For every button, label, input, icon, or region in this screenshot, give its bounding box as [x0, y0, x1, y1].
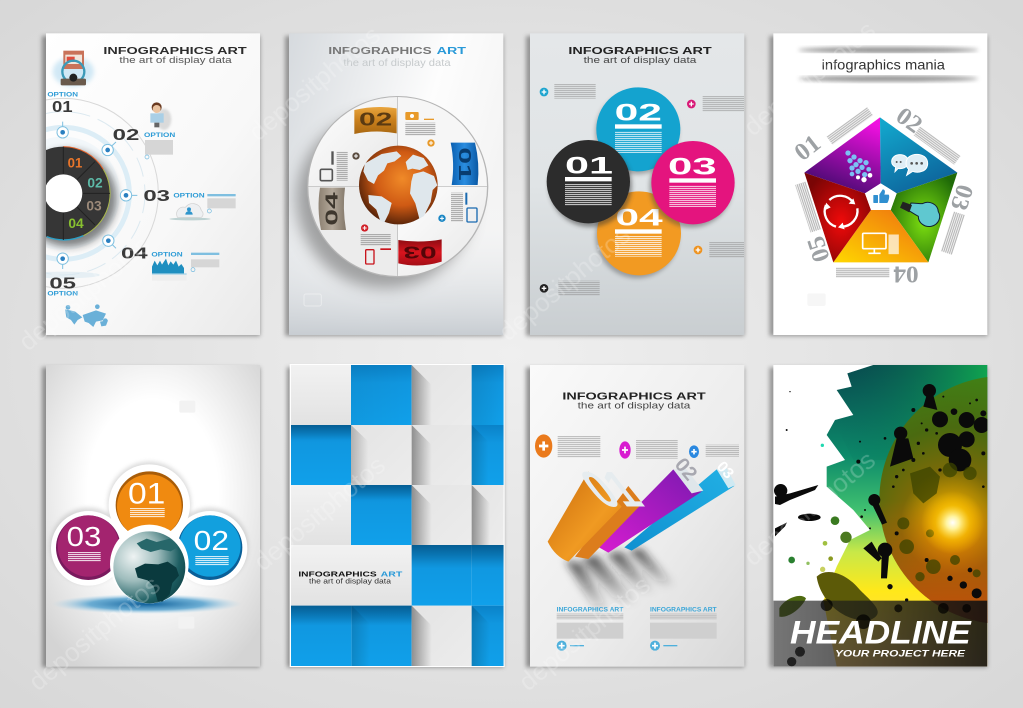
3D number 01 orange [548, 462, 655, 562]
3D number 03 blue: 03 [713, 458, 737, 482]
heading: infographics art: the art of display data [343, 58, 451, 69]
gradient field [823, 365, 987, 667]
olive and green blots [779, 444, 878, 620]
icon: dots [845, 150, 872, 182]
pentagon numbers [789, 102, 978, 288]
faint camera mark [807, 293, 826, 306]
band splatter [787, 599, 971, 666]
pentagon numbers: 02 [891, 102, 927, 139]
pentagon captions [795, 107, 965, 277]
circle 02 blue: 02 [615, 100, 662, 127]
panel: blue and grey squares flyer [287, 364, 505, 667]
shadow ellipse [52, 594, 242, 614]
heading: infographics art: INFOGRAPHICS [298, 570, 377, 579]
panel: circular timeline infographic flyer [39, 34, 263, 339]
watermarks: depositphotos [248, 450, 391, 577]
heading: infographics art: the art of display data [119, 55, 233, 65]
lens flare [924, 494, 981, 552]
panel: 3D numbers flyer [526, 365, 744, 667]
watermarks: depositphotos [493, 220, 636, 347]
option numbers [49, 99, 170, 293]
watermarks: depositphotos [513, 570, 656, 697]
quadrant icons and text [320, 112, 477, 264]
icon: computer [863, 233, 898, 253]
circle 04 orange: 04 [615, 204, 664, 231]
icon: world map [65, 304, 108, 327]
bottom text columns: INFOGRAPHICS ART [650, 606, 717, 613]
white backing shape [50, 462, 248, 586]
watermarks: depositphotos [243, 20, 386, 147]
text placeholders [145, 140, 236, 272]
grid: squares [291, 365, 504, 666]
option numbers: 05 [49, 276, 77, 293]
circle 03 pink [649, 141, 735, 228]
headline band [773, 601, 987, 667]
circle 02 blue [178, 515, 242, 580]
ribbon 02: 02 [359, 108, 392, 129]
ribbon 04 [319, 188, 346, 230]
icon: desk workstation [53, 51, 94, 87]
pentagon numbers: 05 [802, 233, 836, 265]
icon: teal globe [110, 525, 189, 603]
option labels: OPTION [144, 133, 175, 139]
watermarks: depositphotos [23, 570, 166, 697]
icon: cloud [169, 204, 211, 220]
chart: pentagon wedges [804, 117, 957, 262]
option labels: OPTION [173, 194, 205, 200]
planet sphere [879, 377, 988, 623]
pentagon numbers: 03 [945, 181, 978, 214]
icon: thumbs up [873, 189, 889, 203]
ribbon 01 [451, 143, 478, 185]
circle 01 black: 01 [565, 153, 613, 180]
heading: infographics art: ART [381, 570, 403, 579]
ribbon 04: 04 [322, 192, 342, 226]
option labels [47, 92, 205, 297]
option labels: OPTION [151, 253, 183, 259]
faint camera mark [304, 294, 321, 306]
callouts [535, 434, 739, 459]
watermarks: depositphotos [13, 230, 156, 357]
heading: infographics art: INFOGRAPHICS ART [103, 46, 247, 57]
chart: radial option wheel: 03 [86, 198, 102, 214]
pentagon numbers: 01 [789, 130, 826, 167]
3D number 01 orange: 01 [568, 462, 655, 518]
pentagon numbers: 04 [893, 261, 919, 288]
circle 01 black [547, 140, 632, 227]
3D number 02 magenta [598, 454, 703, 553]
option labels: OPTION [47, 291, 78, 297]
option numbers: 03 [143, 188, 170, 205]
panel: splatter headline flyer [766, 364, 990, 670]
panel: pentagon flyer [769, 33, 987, 336]
heading: infographics art: the art of display data [578, 401, 691, 411]
heading: infographics mania: infographics mania [822, 56, 945, 72]
ribbon 03: 03 [403, 243, 437, 263]
option numbers: 02 [113, 127, 139, 144]
3D number 02 magenta: 02 [670, 454, 701, 485]
circle 02 blue: 02 [194, 525, 229, 556]
option numbers: 01 [52, 99, 73, 116]
faint camera marks [178, 401, 195, 629]
watermarks: depositphotos [738, 445, 881, 572]
circle 02 blue [595, 87, 680, 174]
circle 03 purple [56, 515, 121, 580]
heading: infographics mania [790, 47, 987, 82]
darker splatter on sphere [897, 463, 981, 581]
icon: speech bubbles [892, 154, 928, 175]
chart: radial option wheel: 01 [68, 154, 83, 170]
chart: radial option wheel [46, 98, 159, 289]
panel: three circles and globe flyer [42, 365, 260, 667]
fold shadows [291, 365, 504, 666]
heading: infographics art [562, 391, 706, 411]
ribbon 03 [398, 239, 442, 265]
bottom text columns: INFOGRAPHICS ART [557, 606, 623, 613]
ribbon 01: 01 [455, 147, 475, 181]
icon: recycle arrows [825, 196, 858, 229]
circle 03 pink: 03 [668, 154, 717, 181]
3D number 03 blue [624, 458, 737, 551]
chart: segmented ring [297, 96, 488, 288]
chart: blue area [152, 259, 187, 281]
heading: infographics art: ART [437, 46, 466, 57]
panel: globe ring flyer [285, 33, 503, 336]
panel: four overlapping circles flyer [526, 33, 744, 336]
option numbers: 04 [121, 245, 148, 262]
heading: infographics art: the art of display data [309, 578, 391, 585]
option labels: OPTION [47, 92, 78, 98]
icon: light bulb [900, 202, 940, 227]
heading: infographics art: INFOGRAPHICS ART [568, 46, 712, 57]
long shadows [565, 548, 675, 613]
circle 03 purple: 03 [67, 521, 101, 552]
icon: option markers [57, 122, 137, 269]
circle 01 orange [116, 471, 183, 539]
watermarks: depositphotos [738, 15, 881, 142]
circle 04 orange [595, 191, 681, 278]
heading: infographics art: the art of display data [584, 55, 697, 65]
heading: infographics art [568, 46, 712, 65]
ribbon 02 [354, 107, 397, 134]
chart: radial option wheel: 04 [68, 215, 84, 231]
heading: infographics art [328, 46, 466, 69]
heading: infographics art: INFOGRAPHICS [328, 46, 432, 57]
icon: orange globe [359, 146, 438, 224]
bottom text columns [557, 606, 717, 651]
heading: infographics art: INFOGRAPHICS ART [562, 391, 706, 402]
heading: infographics art [298, 570, 403, 585]
headline: YOUR PROJECT HERE [835, 649, 966, 659]
circle 01 orange: 01 [128, 477, 165, 510]
ink splatter [774, 384, 990, 602]
chart: radial option wheel: 02 [87, 174, 103, 190]
heading: infographics art [103, 46, 247, 65]
callouts with plus icons [540, 84, 744, 296]
headline: HEADLINE [790, 613, 972, 650]
icon: person reading [150, 102, 171, 130]
